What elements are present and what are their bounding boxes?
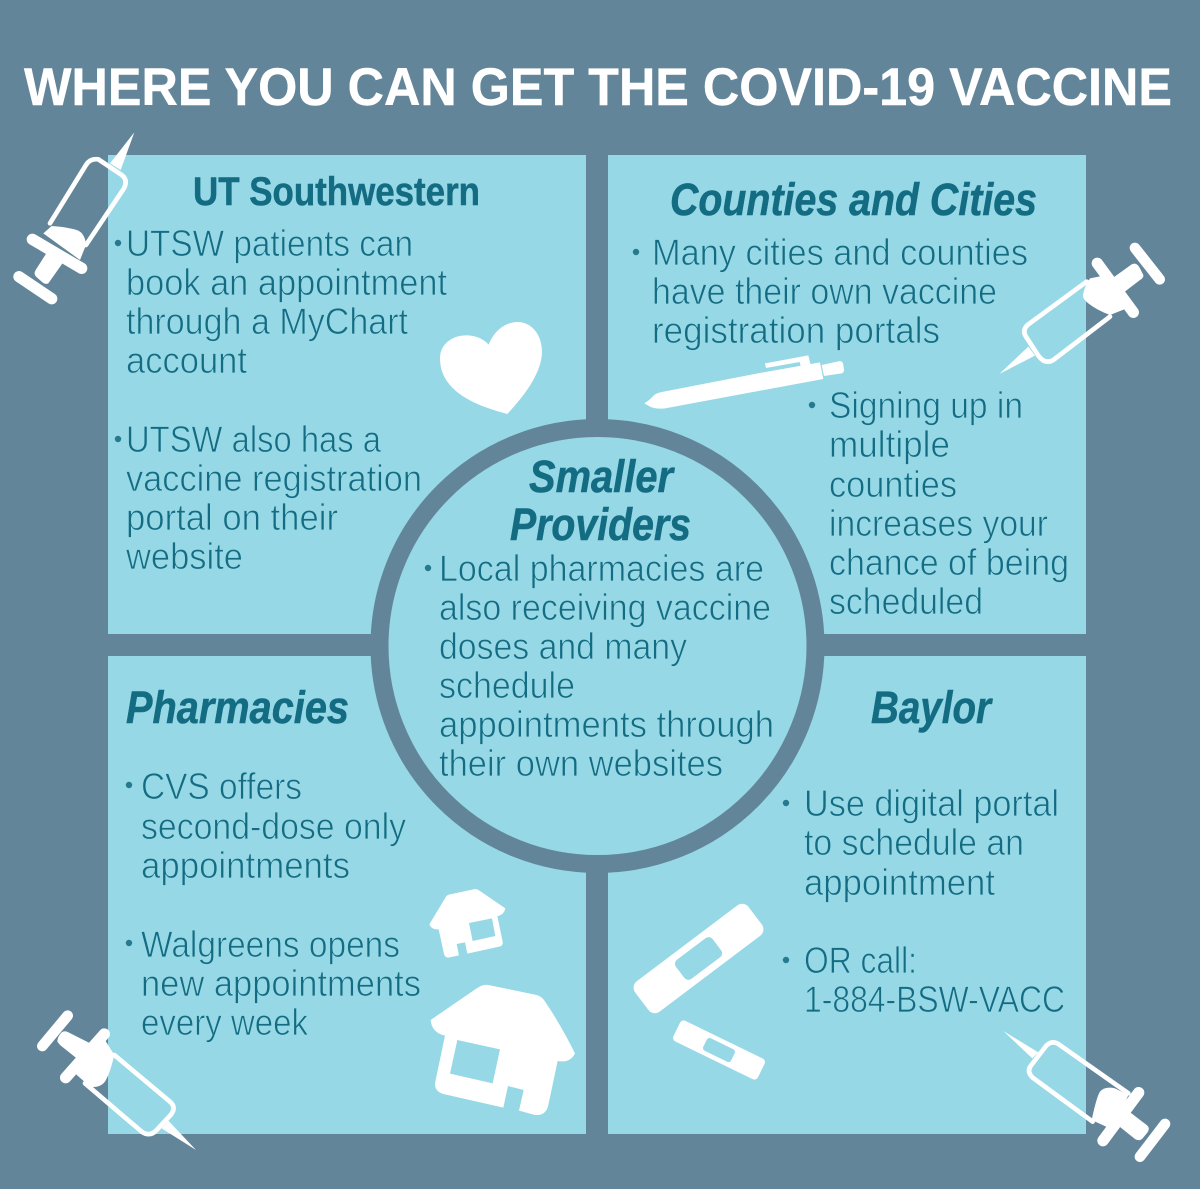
text block: local pharmacies bbox=[425, 548, 774, 784]
text block: UTSW portal: portal on their bbox=[126, 497, 338, 538]
text block: phone number: 1-884-BSW-VACC bbox=[804, 979, 1065, 1020]
text block: CVS: appointments bbox=[141, 845, 350, 886]
text block: local pharmacies: their own websites bbox=[439, 743, 723, 784]
icon: large bandage bbox=[630, 901, 767, 1016]
text block: city portals: Many cities and counties bbox=[652, 232, 1028, 273]
icon: syringe top right bbox=[999, 248, 1160, 374]
heading: UT Southwestern: UT Southwestern bbox=[193, 170, 480, 214]
text block: CVS: second-dose only bbox=[141, 806, 406, 847]
panel: Counties and Cities bbox=[608, 155, 1086, 634]
text block: multiple counties: chance of being bbox=[829, 542, 1069, 583]
text block: UTSW portal bbox=[115, 419, 422, 577]
icon: small bandage bbox=[672, 1019, 766, 1081]
panel: Smaller Providers bbox=[380, 428, 816, 864]
text block: UTSW patients: through a MyChart bbox=[126, 301, 409, 342]
text block: local pharmacies: Local pharmacies are bbox=[439, 548, 764, 589]
text block: multiple counties: multiple bbox=[829, 424, 950, 465]
icon: large house bbox=[431, 985, 575, 1115]
text block: Walgreens: new appointments bbox=[141, 963, 421, 1004]
text block: UTSW patients: book an appointment bbox=[126, 262, 448, 303]
text block: CVS: CVS offers bbox=[141, 766, 302, 807]
panel: Pharmacies bbox=[108, 656, 586, 1134]
text block: multiple counties: Signing up in bbox=[829, 385, 1023, 426]
text block: digital portal: appointment bbox=[804, 862, 996, 903]
heading: Smaller Providers: Providers bbox=[510, 499, 691, 550]
text block: UTSW patients bbox=[115, 223, 448, 381]
text block: local pharmacies: appointments through bbox=[439, 704, 774, 745]
text block: Walgreens: every week bbox=[141, 1002, 308, 1043]
heading: Smaller Providers bbox=[510, 451, 691, 550]
icon: syringe bottom left bbox=[42, 1016, 196, 1150]
heading: Smaller Providers: Smaller bbox=[529, 451, 675, 502]
icon: syringe top left bbox=[19, 132, 134, 299]
text block: digital portal: Use digital portal bbox=[804, 783, 1059, 824]
text block: digital portal bbox=[783, 783, 1059, 903]
text block: city portals: have their own vaccine bbox=[652, 271, 997, 312]
text block: UTSW portal: website bbox=[125, 536, 243, 577]
text block: UTSW patients: account bbox=[126, 340, 248, 381]
text block: multiple counties bbox=[809, 385, 1069, 622]
text block: local pharmacies: also receiving vaccine bbox=[439, 587, 771, 628]
panel: Baylor bbox=[608, 656, 1086, 1134]
text block: UTSW portal: UTSW also has a bbox=[126, 419, 381, 460]
text block: multiple counties: scheduled bbox=[829, 581, 983, 622]
text block: local pharmacies: schedule bbox=[439, 665, 575, 706]
title: WHERE YOU CAN GET THE COVID-19 VACCINE bbox=[24, 58, 1172, 117]
heading: Baylor: Baylor bbox=[871, 682, 993, 733]
icon: small house bbox=[429, 889, 505, 958]
text block: UTSW patients: UTSW patients can bbox=[126, 223, 413, 264]
icon: pen bbox=[644, 355, 844, 409]
text block: city portals: registration portals bbox=[652, 310, 940, 351]
text block: UTSW portal: vaccine registration bbox=[126, 458, 422, 499]
heading: Counties and Cities: Counties and Cities bbox=[670, 174, 1037, 225]
icon: syringe bottom right bbox=[1003, 1031, 1165, 1157]
text block: multiple counties: counties bbox=[829, 464, 957, 505]
text block: multiple counties: increases your bbox=[829, 503, 1048, 544]
text block: phone number: OR call: bbox=[804, 940, 917, 981]
text block: city portals bbox=[633, 232, 1028, 351]
text block: digital portal: to schedule an bbox=[804, 822, 1024, 863]
heading: Pharmacies: Pharmacies bbox=[126, 682, 349, 733]
text block: CVS bbox=[126, 766, 406, 886]
text block: Walgreens bbox=[126, 924, 421, 1043]
icon: heart bbox=[440, 322, 542, 414]
text block: phone number bbox=[783, 940, 1065, 1020]
text block: Walgreens: Walgreens opens bbox=[141, 924, 400, 965]
text block: local pharmacies: doses and many bbox=[439, 626, 687, 667]
panel: UT Southwestern bbox=[108, 155, 586, 634]
